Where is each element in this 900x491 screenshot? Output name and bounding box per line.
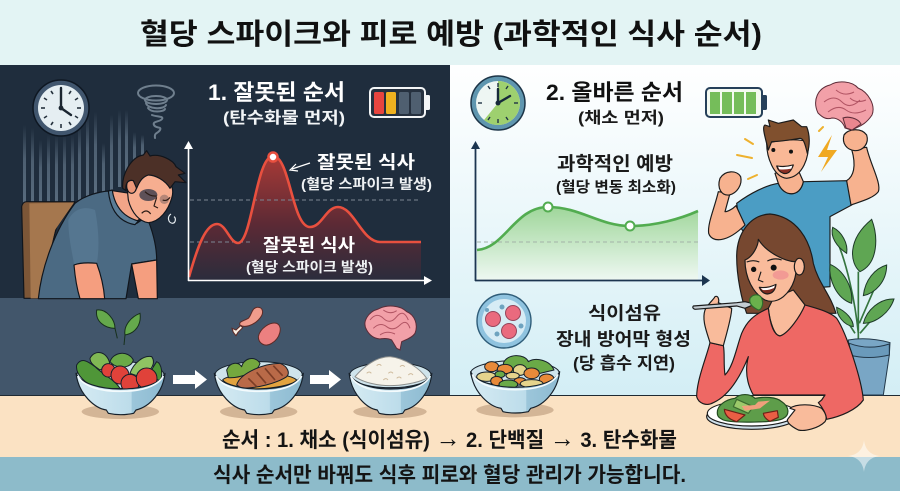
- subheading: (탄수화물 먼저): [223, 109, 345, 127]
- icon: fiber petri dish: [477, 294, 531, 348]
- panel: wrong order background: [0, 65, 450, 298]
- heading: right order: [546, 80, 683, 127]
- bottom banner: [0, 457, 900, 491]
- bowl 1: vegetables: [76, 353, 165, 419]
- panel: wrong order content: [22, 80, 432, 299]
- raised arm right: [847, 147, 879, 205]
- text: fiber explanation: (당 흡수 지연): [573, 354, 675, 373]
- bowl 4: right side mixed vegetables: [471, 356, 560, 417]
- illustration: tired man on chair: [22, 151, 186, 299]
- illustration: energetic man with brain: [709, 120, 879, 290]
- hair: [764, 120, 809, 153]
- panel: right order content: [471, 76, 894, 430]
- face: [745, 239, 796, 301]
- neck: [775, 167, 803, 194]
- eating hand: [704, 296, 732, 346]
- panel: lower left band: [0, 298, 450, 397]
- icon: leaves: [96, 310, 140, 345]
- fist left: [719, 172, 741, 195]
- icon: low battery: [370, 88, 430, 117]
- raised arm left: [709, 192, 745, 240]
- fatigue stripes: [23, 110, 144, 210]
- icon: wall clock slow: [33, 80, 89, 136]
- callout: stable label: (혈당 변동 최소화): [556, 179, 676, 196]
- icon: clock green: [471, 76, 525, 130]
- hand on table: [787, 405, 826, 430]
- title: 혈당 스파이크와 피로 예방 (과학적인 식사 순서): [140, 18, 762, 51]
- fork: [693, 302, 755, 309]
- callout: peak label: 잘못된 식사: [317, 152, 415, 172]
- icon: happy brain: [816, 82, 873, 130]
- neck: [768, 290, 805, 336]
- text: fiber explanation: [556, 304, 691, 373]
- arrow to peak: [290, 163, 310, 171]
- plate and salad: [707, 395, 797, 429]
- subheading: (채소 먼저): [578, 109, 664, 127]
- fist right: [843, 130, 867, 151]
- heading: right order: 2. 올바른 순서: [546, 80, 683, 105]
- illustration: potted plant: [830, 219, 894, 395]
- callout: stable label: 과학적인 예방: [557, 153, 673, 175]
- icon: full battery: [706, 88, 767, 117]
- bowl 3: rice: [349, 357, 432, 418]
- arrow: step two to three: [310, 370, 341, 389]
- long hair: [737, 214, 836, 313]
- text: fiber explanation: 식이섬유: [588, 304, 661, 324]
- callout: lower label: 잘못된 식사: [263, 236, 355, 256]
- callout: stable label: [556, 153, 676, 196]
- heading: wrong order: 1. 잘못된 순서: [208, 80, 345, 105]
- callout: lower label: [246, 236, 373, 275]
- icon: dizzy swirl: [138, 86, 174, 138]
- text: bottom message: 식사 순서만 바꿔도 식후 피로와 혈당 관리가 가능합니다.: [213, 464, 686, 487]
- text: order steps: 순서 : 1. 채소 (식이섬유) → 2. 단백질 → 3. 탄수화물: [222, 423, 677, 453]
- callout: peak label: (혈당 스파이크 발생): [301, 176, 432, 192]
- text: fiber explanation: 장내 방어막 형성: [556, 330, 691, 350]
- icon: sparkle: [848, 440, 880, 472]
- icon: brain: [365, 306, 416, 350]
- bowl 2: protein: [214, 359, 303, 419]
- sweater: [697, 305, 863, 419]
- arrow: step one to two: [173, 370, 207, 389]
- chart: blood sugar spike: [184, 141, 432, 285]
- illustration: woman eating salad: [693, 214, 863, 430]
- energy sparks: [737, 127, 823, 179]
- panel: right order background: [450, 65, 900, 397]
- callout: lower label: (혈당 스파이크 발생): [246, 259, 373, 275]
- shirt: [737, 181, 852, 290]
- face: [767, 140, 808, 178]
- icon: meat: [232, 307, 280, 345]
- heading: wrong order: [208, 80, 345, 127]
- callout: peak label: [301, 152, 432, 192]
- chart: stable blood sugar: [471, 141, 710, 286]
- table surface: [0, 396, 900, 457]
- icon: lightning bolt: [818, 135, 837, 172]
- broccoli bite: [750, 295, 763, 310]
